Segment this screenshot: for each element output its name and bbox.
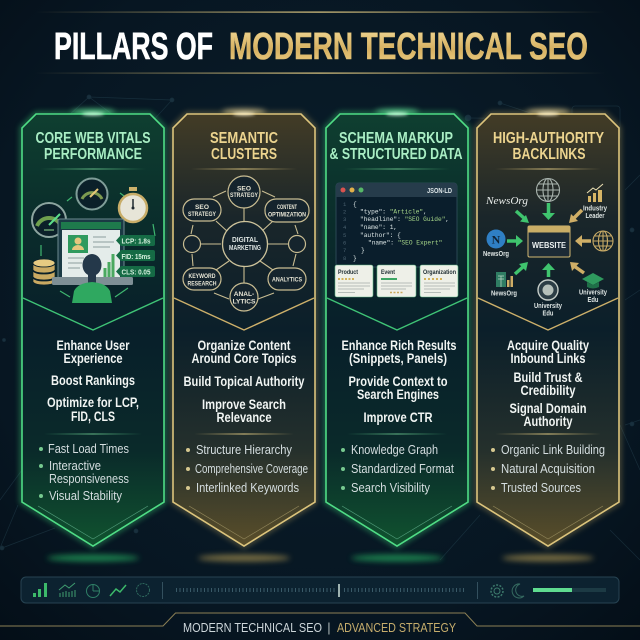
source: newsorg badge xyxy=(483,230,509,258)
illustration: performance dashboard xyxy=(32,178,155,303)
node: seo strategy top: SEO xyxy=(237,186,251,192)
footer text xyxy=(183,620,456,635)
icon: industry leader xyxy=(583,184,607,220)
bullet list: Visual Stability xyxy=(49,489,123,503)
benefits text: Relevance xyxy=(216,410,272,425)
metric tags: CLS: 0.05 xyxy=(122,268,151,276)
metric tags xyxy=(116,235,155,277)
line numbers: 4 xyxy=(343,224,347,231)
source: university cap: University xyxy=(579,290,607,296)
footer text: | xyxy=(327,620,331,635)
bullet list: Search Visibility xyxy=(351,481,431,495)
code: "name": 1, xyxy=(360,224,397,231)
icon: bar chart xyxy=(33,583,47,597)
source: newsorg script: NewsOrg xyxy=(485,195,529,207)
line numbers: 8 xyxy=(343,255,346,262)
benefits text xyxy=(507,338,589,429)
bottom toolbar xyxy=(21,577,619,603)
icon: dial xyxy=(136,584,150,596)
benefits text: Organize Content xyxy=(198,338,291,353)
toolbar divider right xyxy=(477,582,478,599)
bullet list xyxy=(39,442,129,503)
node: keyword research: RESEARCH xyxy=(188,280,217,288)
benefits text: Signal Domain xyxy=(510,401,586,416)
slider ticks xyxy=(176,584,465,597)
source: university cap xyxy=(579,273,607,304)
network background pattern xyxy=(0,95,640,560)
benefits text xyxy=(342,338,456,425)
progress bar xyxy=(533,588,606,592)
code: "type": "Article", xyxy=(360,208,427,216)
source: newsorg chart: NewsOrg xyxy=(491,290,517,298)
heading: CLUSTERS xyxy=(211,146,277,163)
line numbers: 7 xyxy=(343,247,346,254)
heading xyxy=(36,130,151,163)
node: content optimization: OPTIMIZATION xyxy=(268,212,306,218)
heading: SEMANTIC xyxy=(210,130,278,147)
node: seo strategy left: SEO xyxy=(195,204,209,211)
node: seo strategy left xyxy=(183,199,221,221)
node: seo strategy top xyxy=(228,176,260,208)
code xyxy=(353,201,449,262)
bullet list xyxy=(341,443,454,495)
benefits text: Enhance User xyxy=(56,338,130,353)
node: analytics right: ANALYTICS xyxy=(272,276,302,284)
benefits text: FID, CLS xyxy=(71,409,115,424)
panel: core web vitals xyxy=(22,109,164,562)
icon: line chart xyxy=(59,583,75,597)
title xyxy=(54,26,588,68)
benefits text: Around Core Topics xyxy=(192,351,296,366)
bullet list: Structure Hierarchy xyxy=(196,443,293,457)
bullet list: Natural Acquisition xyxy=(501,462,595,476)
icon: trend line xyxy=(110,585,126,596)
benefits text: Improve CTR xyxy=(364,410,433,425)
benefits text: Experience xyxy=(64,351,123,366)
node: keyword research xyxy=(183,268,221,290)
heading xyxy=(210,130,278,163)
node: analytics bottom: LYTICS xyxy=(233,298,256,306)
toolbar divider left xyxy=(162,582,163,599)
rich result card: event: Event xyxy=(381,270,395,276)
footer frame xyxy=(0,613,640,626)
heading xyxy=(493,130,604,163)
benefits text: (Snippets, Panels) xyxy=(349,351,447,366)
panel: high-authority backlinks xyxy=(477,109,619,562)
source: newsorg badge: NewsOrg xyxy=(483,251,509,258)
icon: stopwatch xyxy=(119,187,147,222)
icon: gear xyxy=(491,585,503,597)
source: university seal: Edu xyxy=(542,310,554,318)
laptop base xyxy=(52,277,133,285)
icon: person xyxy=(72,254,112,303)
metric tags: FID: 15ms xyxy=(122,252,150,261)
bullet list: Standardized Format xyxy=(351,462,454,476)
rich result card: organization: Organization xyxy=(423,270,456,276)
bullet list: Interactive xyxy=(49,459,101,473)
benefits text: Credibility xyxy=(520,383,576,398)
icon: pie chart xyxy=(86,584,100,598)
heading: & STRUCTURED DATA xyxy=(330,146,463,163)
benefits text: Enhance Rich Results xyxy=(342,338,456,353)
line numbers: 2 xyxy=(343,208,346,216)
heading: PERFORMANCE xyxy=(44,146,142,163)
source: university cap: Edu xyxy=(588,297,598,304)
benefits text: Optimize for LCP, xyxy=(47,395,139,410)
benefits text: Build Topical Authority xyxy=(184,374,305,389)
source: university seal xyxy=(534,280,562,318)
code: { xyxy=(353,201,357,208)
benefits text: Acquire Quality xyxy=(507,338,589,353)
benefits text xyxy=(184,338,305,425)
title rule bottom xyxy=(35,72,605,74)
title: PILLARS OF xyxy=(54,26,213,68)
icon: industry leader: Leader xyxy=(586,213,605,220)
node: seo strategy left: STRATEGY xyxy=(188,211,216,218)
node: keyword research: KEYWORD xyxy=(188,273,216,280)
node: seo strategy top: STRATEGY xyxy=(230,192,258,199)
source: university seal: University xyxy=(534,303,562,310)
node: analytics bottom: ANAL- xyxy=(234,291,254,298)
icon: clock xyxy=(512,584,524,598)
bullet list: Interlinked Keywords xyxy=(196,481,299,495)
window controls xyxy=(340,188,364,192)
arrows into website xyxy=(507,203,591,277)
benefits text: Build Trust & xyxy=(514,370,583,385)
icon: globe right xyxy=(593,231,613,251)
bullet list: Organic Link Building xyxy=(501,443,605,457)
node: small left xyxy=(184,236,200,252)
node: center: DIGITAL xyxy=(232,237,259,244)
icon: database xyxy=(33,259,55,285)
icon: gauge top xyxy=(76,178,108,210)
window label: JSON-LD xyxy=(427,188,452,195)
line numbers xyxy=(343,201,347,262)
bullet list: Knowledge Graph xyxy=(351,443,438,457)
rich result card: product: Product xyxy=(338,270,358,276)
node: content optimization xyxy=(265,199,309,222)
node: center: MARKETING xyxy=(229,245,261,252)
node: analytics bottom xyxy=(230,283,258,311)
bullet list: Comprehensive Coverage xyxy=(195,462,308,476)
bullet list: Responsiveness xyxy=(49,472,129,486)
line numbers: 3 xyxy=(343,216,346,223)
metric tags: LCP: 1.8s xyxy=(122,236,150,246)
benefits text: Provide Context to xyxy=(348,374,448,389)
code: } xyxy=(353,255,357,262)
icon: industry leader: Industry xyxy=(583,206,607,212)
benefits text: Boost Rankings xyxy=(51,373,135,388)
bullet list: Fast Load Times xyxy=(48,442,129,456)
source: newsorg badge: N xyxy=(492,232,501,246)
code: } xyxy=(361,247,365,254)
footer text: MODERN TECHNICAL SEO xyxy=(183,620,322,635)
benefits text: Search Engines xyxy=(357,387,439,402)
benefits text xyxy=(47,338,139,424)
code: "author": { xyxy=(360,232,401,239)
icon: gauge left xyxy=(32,203,66,237)
icon: globe top xyxy=(536,178,560,202)
benefits text: Authority xyxy=(524,414,573,429)
illustration: backlink sources xyxy=(483,178,613,318)
illustration: code window xyxy=(335,183,458,297)
footer text: ADVANCED STRATEGY xyxy=(337,620,456,635)
heading: HIGH-AUTHORITY xyxy=(493,130,604,147)
title rule top xyxy=(35,12,605,13)
benefits text: Inbound Links xyxy=(510,351,586,366)
bullet list xyxy=(186,443,308,495)
line numbers: 1 xyxy=(343,201,347,208)
node: content optimization: CONTENT xyxy=(277,204,297,211)
node: center xyxy=(222,222,268,266)
node: small right xyxy=(288,236,306,252)
line numbers: 6 xyxy=(343,240,346,246)
code: "headline": "SEO Guide", xyxy=(360,216,449,223)
icon: website box: WEBSITE xyxy=(532,240,566,250)
heading: BACKLINKS xyxy=(512,146,586,163)
line numbers: 5 xyxy=(343,232,346,239)
panel: schema markup xyxy=(326,109,468,562)
heading: CORE WEB VITALS xyxy=(36,130,151,147)
illustration: topic cluster diagram xyxy=(183,176,309,311)
panel: semantic clusters xyxy=(173,109,315,562)
icon: monitor xyxy=(58,219,124,279)
bullet list xyxy=(491,443,605,495)
code: "name": "SEO Expert" xyxy=(368,240,442,246)
benefits text: Improve Search xyxy=(202,397,286,412)
heading xyxy=(330,130,463,163)
bullet list: Trusted Sources xyxy=(501,481,581,495)
heading: SCHEMA MARKUP xyxy=(339,130,453,147)
